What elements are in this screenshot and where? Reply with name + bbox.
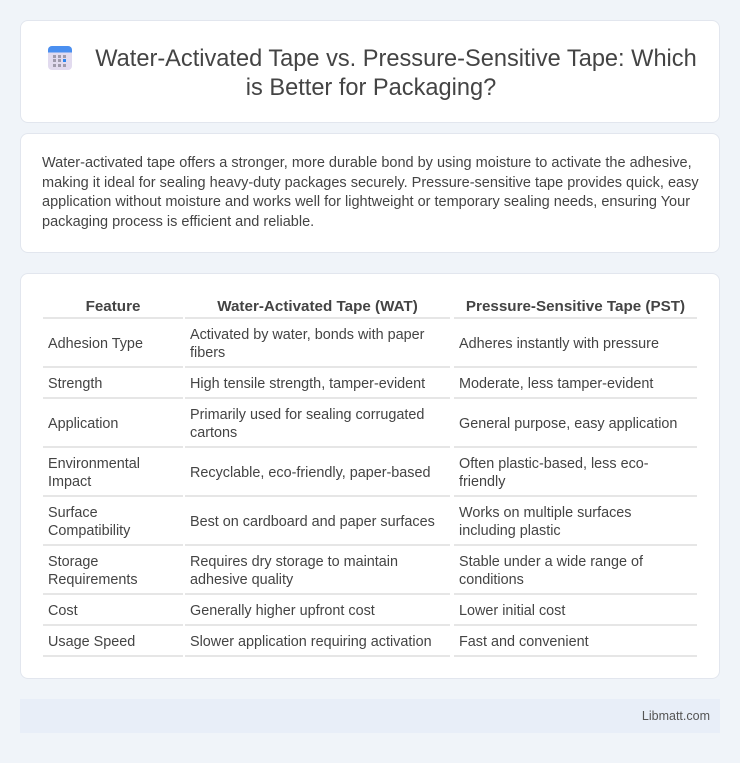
table: feature comparison: Usage Speed [48,634,135,650]
title: Water-Activated Tape vs. Pressure-Sensitive Tape: Which [95,46,697,72]
summary text: Water-activated tape offers a stronger, more durable bond by using moisture to activate the adhesive, [42,155,692,171]
table: feature comparison: conditions [459,572,524,588]
table: feature comparison: Activated by water, bonds with paper [190,327,424,343]
summary text: application without moisture and works well for lightweight or temporary sealing needs, ensuring Your [42,194,690,210]
header: Pressure-Sensitive Tape: Pressure-Sensitive Tape (PST) [466,298,685,315]
panel: summary [20,133,720,253]
table: feature comparison: friendly [459,474,505,490]
summary text: making it ideal for sealing heavy-duty packages securely. Pressure-sensitive tape provides quick, easy [42,175,699,191]
table: feature comparison: High tensile strength, tamper-evident [190,376,425,392]
table: feature comparison: Lower initial cost [459,603,565,619]
table: feature comparison: Adheres instantly with pressure [459,336,659,352]
table: feature comparison: Generally higher upfront cost [190,603,375,619]
table: feature comparison: Best on cardboard and paper surfaces [190,514,435,530]
table: feature comparison: Compatibility [48,523,130,539]
footer credit: Libmatt.com [642,709,710,723]
icon: calendar grid [48,46,72,70]
table: feature comparison: Environmental [48,456,140,472]
summary text: packaging process is efficient and reliable. [42,214,314,230]
table: feature comparison: Requirements [48,572,138,588]
table: feature comparison: cartons [190,425,237,441]
table: feature comparison: Stable under a wide range of [459,554,643,570]
table: feature comparison: Moderate, less tamper-evident [459,376,653,392]
table: feature comparison: Storage [48,554,98,570]
table: feature comparison: Primarily used for sealing corrugated [190,407,424,423]
table: feature comparison: Adhesion Type [48,336,143,352]
table: feature comparison: Application [48,416,118,432]
table: feature comparison: Fast and convenient [459,634,589,650]
header: Water-Activated Tape: Water-Activated Tape (WAT) [217,298,418,315]
title [95,46,697,101]
panel: comparison table [20,273,720,679]
table: feature comparison: including plastic [459,523,561,539]
title: is Better for Packaging? [246,75,496,101]
table: feature comparison: Recyclable, eco-friendly, paper-based [190,465,431,481]
panel: title card [20,20,720,123]
table: feature comparison: Cost [48,603,78,619]
table: feature comparison: adhesive quality [190,572,293,588]
table: feature comparison: Often plastic-based, less eco- [459,456,649,472]
table: feature comparison: Strength [48,376,102,392]
table: feature comparison: Slower application requiring activation [190,634,432,650]
summary text [42,155,699,230]
header: Feature: Feature [86,298,140,315]
table: feature comparison: Works on multiple surfaces [459,505,631,521]
table: feature comparison: General purpose, easy application [459,416,677,432]
table: feature comparison: Impact [48,474,91,490]
table: feature comparison: fibers [190,345,225,361]
footer bar [20,699,720,733]
table: feature comparison: Requires dry storage to maintain [190,554,398,570]
table: feature comparison: Surface [48,505,98,521]
